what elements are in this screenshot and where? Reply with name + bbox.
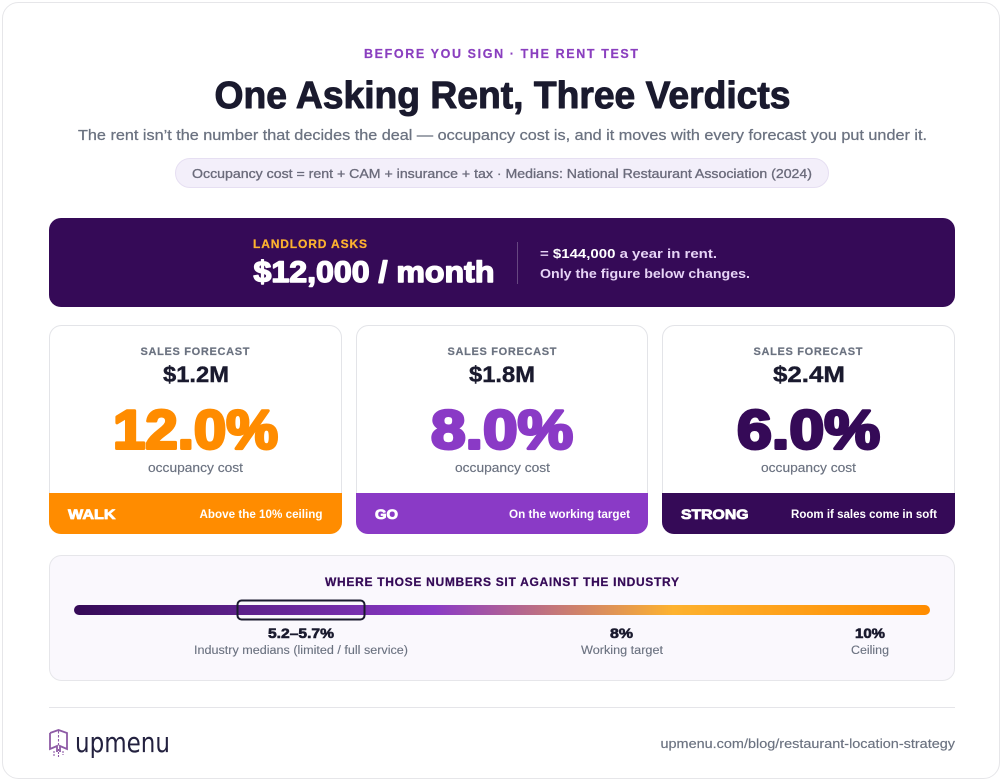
forecast value: $1.8M bbox=[469, 362, 535, 387]
verdict band: Above the 10% ceiling bbox=[200, 509, 322, 521]
card: go bbox=[356, 326, 648, 534]
forecast label: SALES FORECAST bbox=[448, 346, 557, 358]
verdict band: On the working target bbox=[509, 509, 630, 521]
occupancy label: occupancy cost bbox=[148, 461, 244, 475]
occupancy label: occupancy cost bbox=[761, 461, 857, 475]
label: medians: 5.2–5.7% bbox=[268, 626, 334, 641]
panel heading: WHERE THOSE NUMBERS SIT AGAINST THE INDUSTRY bbox=[325, 575, 679, 589]
verdict band: GO bbox=[375, 506, 398, 522]
verdict band: WALK bbox=[68, 506, 116, 522]
label: medians: Industry medians (limited / full service) bbox=[194, 645, 408, 657]
occupancy percentage: 8.0% bbox=[431, 398, 573, 460]
annual rent note: = $144,000 a year in rent. bbox=[540, 246, 717, 261]
verdict band: STRONG bbox=[681, 506, 749, 522]
icon: open book bbox=[50, 730, 67, 757]
formula pill: Occupancy cost = rent + CAM + insurance + tax · Medians: National Restaurant Association (2024) bbox=[192, 167, 812, 181]
label: ceiling: 10% bbox=[855, 626, 885, 641]
label: ceiling: Ceiling bbox=[851, 645, 889, 657]
label: medians bbox=[194, 626, 408, 657]
wordmark: upmenu bbox=[75, 726, 170, 759]
subtitle: The rent isn’t the number that decides the deal — occupancy cost is, and it moves with every forecast you put under it. bbox=[78, 128, 927, 144]
landlord label: LANDLORD ASKS bbox=[253, 237, 367, 251]
label: ceiling bbox=[851, 626, 889, 657]
label: working target: Working target bbox=[581, 645, 664, 657]
verdict band bbox=[662, 493, 955, 534]
changes note: Only the figure below changes. bbox=[540, 266, 750, 281]
card: strong bbox=[662, 326, 955, 534]
formula pill bbox=[176, 158, 828, 188]
occupancy label: occupancy cost bbox=[455, 461, 551, 475]
verdict band bbox=[356, 493, 648, 534]
occupancy percentage: 6.0% bbox=[737, 398, 880, 460]
rent banner bbox=[49, 218, 955, 307]
verdict band: Room if sales come in soft bbox=[791, 509, 937, 521]
card: walk bbox=[49, 326, 342, 534]
verdict band bbox=[49, 493, 342, 534]
gradient scale bar bbox=[74, 605, 930, 615]
panel: industry scale bbox=[50, 556, 954, 680]
median range marker bbox=[238, 600, 364, 620]
occupancy percentage: 12.0% bbox=[113, 398, 278, 460]
asking rent: $12,000 / month bbox=[254, 256, 494, 289]
label: working target bbox=[581, 626, 664, 657]
forecast label: SALES FORECAST bbox=[754, 346, 863, 358]
label: working target: 8% bbox=[610, 626, 633, 641]
title: One Asking Rent, Three Verdicts bbox=[214, 75, 790, 117]
source url: upmenu.com/blog/restaurant-location-strategy bbox=[660, 737, 956, 751]
eyebrow: BEFORE YOU SIGN · THE RENT TEST bbox=[364, 47, 638, 61]
forecast label: SALES FORECAST bbox=[140, 346, 250, 358]
logo bbox=[50, 726, 170, 759]
forecast value: $1.2M bbox=[163, 362, 229, 387]
forecast value: $2.4M bbox=[773, 362, 845, 387]
